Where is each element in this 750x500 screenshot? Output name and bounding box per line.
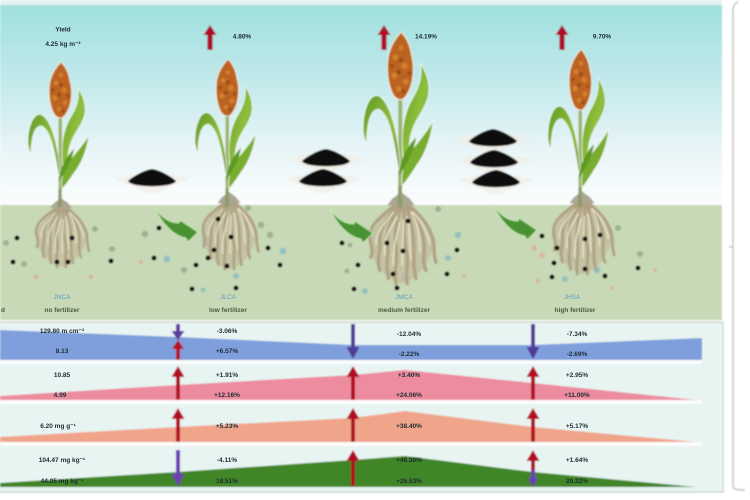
table column: high fertilizer changes: -2.69% xyxy=(567,351,588,358)
table column: high fertilizer changes: -7.34% xyxy=(567,331,588,338)
table column: low fertilizer changes: +1.91% xyxy=(216,372,238,379)
band: orange row xyxy=(0,411,696,442)
table column: low fertilizer changes: +6.57% xyxy=(216,348,238,355)
table column: medium fertilizer changes: -12.04% xyxy=(397,331,421,338)
table column: high fertilizer changes xyxy=(564,331,590,485)
yield red arrow 3 xyxy=(556,25,568,50)
row separators xyxy=(0,360,702,446)
table column: baseline values: 10.85 xyxy=(54,372,71,379)
black soil particles xyxy=(10,216,640,292)
treatment label: JLCA: low fertilizer xyxy=(209,307,247,314)
biochar piles: two xyxy=(286,149,363,193)
table column: low fertilizer changes xyxy=(214,328,240,485)
table column: baseline values: 6.20 mg g⁻¹ xyxy=(40,423,76,430)
plant: medium fertilizer xyxy=(363,32,433,207)
plant roots: high fertilizer xyxy=(553,191,614,274)
yield change 3: 9.70% xyxy=(593,34,611,40)
table column: baseline values: 104.47 mg kg⁻¹ xyxy=(39,457,85,464)
treatment label: JNCA xyxy=(44,294,80,314)
treatment label: JNCA: no fertilizer xyxy=(44,307,80,314)
column arrows 1 xyxy=(172,324,184,486)
table column: medium fertilizer changes: +24.06% xyxy=(396,392,422,399)
panel: sky background xyxy=(0,5,722,205)
plant: high fertilizer xyxy=(548,49,609,207)
treatment label: JLCA: JLCA xyxy=(220,294,237,301)
table column: low fertilizer changes: +12.16% xyxy=(214,392,240,399)
table column: high fertilizer changes: +5.17% xyxy=(566,423,588,430)
column arrows 2 xyxy=(346,324,360,486)
table column: baseline values xyxy=(39,328,85,485)
plant: low fertilizer xyxy=(195,59,256,207)
table column: baseline values: 129.80 m cm⁻² xyxy=(40,328,85,335)
yield red arrow 2 xyxy=(378,25,390,50)
table column: medium fertilizer changes: +3.40% xyxy=(398,372,420,379)
table column: low fertilizer changes: 18.51% xyxy=(216,478,238,485)
biochar pile: one xyxy=(115,169,189,193)
treatment label: JMCA: JMCA xyxy=(395,294,414,301)
table column: medium fertilizer changes: +26.53% xyxy=(396,478,422,485)
green arrow 3 xyxy=(494,206,537,240)
biochar piles: three xyxy=(456,129,533,194)
treatment label: JHSA: high fertilizer xyxy=(555,307,596,314)
plant roots: low fertilizer xyxy=(203,192,258,269)
band: pink row xyxy=(0,370,696,400)
table column: low fertilizer changes: -4.11% xyxy=(217,457,237,464)
treatment label: cut off: d xyxy=(1,307,5,314)
column arrows 3 xyxy=(526,324,540,487)
plant: no fertilizer xyxy=(28,62,89,207)
yield change 1: 4.80% xyxy=(233,34,251,40)
table column: medium fertilizer changes: +46.30% xyxy=(396,457,422,464)
treatment label: JMCA xyxy=(378,294,430,314)
table column: baseline values: 4.99 xyxy=(54,392,67,399)
table column: high fertilizer changes: 20.32% xyxy=(566,478,588,485)
plant roots: no fertilizer xyxy=(36,198,89,267)
band: green row xyxy=(0,456,696,487)
treatment label: JHSA: JHSA xyxy=(564,294,581,301)
yield red arrow 1 xyxy=(204,25,216,50)
panel: soil background xyxy=(0,205,722,320)
treatment label: JMCA: medium fertilizer xyxy=(378,307,430,314)
yield heading: 4.25 kg m⁻² xyxy=(45,41,81,48)
right side bracket line xyxy=(729,2,745,490)
yield heading: Yield xyxy=(55,26,71,34)
yield heading xyxy=(45,26,81,48)
green arrow 2 xyxy=(330,209,373,243)
table column: baseline values: 44.05 mg kg⁻¹ xyxy=(41,478,83,485)
band: blue row xyxy=(0,330,702,360)
treatment label: JNCA: JNCA xyxy=(54,294,71,301)
plant roots: medium fertilizer xyxy=(370,192,436,284)
table column: high fertilizer changes: +2.95% xyxy=(566,372,588,379)
table column: low fertilizer changes: +5.23% xyxy=(216,423,238,430)
yield change 2: 14.19% xyxy=(415,34,437,40)
table column: high fertilizer changes: +1.64% xyxy=(566,457,588,464)
table column: medium fertilizer changes: +38.40% xyxy=(396,423,422,430)
treatment label: JLCA xyxy=(209,294,247,314)
table column: medium fertilizer changes xyxy=(396,331,422,485)
table column: baseline values: 8.13 xyxy=(56,348,69,355)
top page band xyxy=(0,0,722,6)
panel: data table background xyxy=(0,322,723,492)
table column: medium fertilizer changes: -2.22% xyxy=(399,351,420,358)
soil particles xyxy=(3,205,657,294)
table column: high fertilizer changes: +11.00% xyxy=(564,392,590,399)
treatment label: JHSA xyxy=(555,294,596,314)
green arrow 1 xyxy=(155,208,198,242)
table column: low fertilizer changes: -3.06% xyxy=(217,328,238,335)
